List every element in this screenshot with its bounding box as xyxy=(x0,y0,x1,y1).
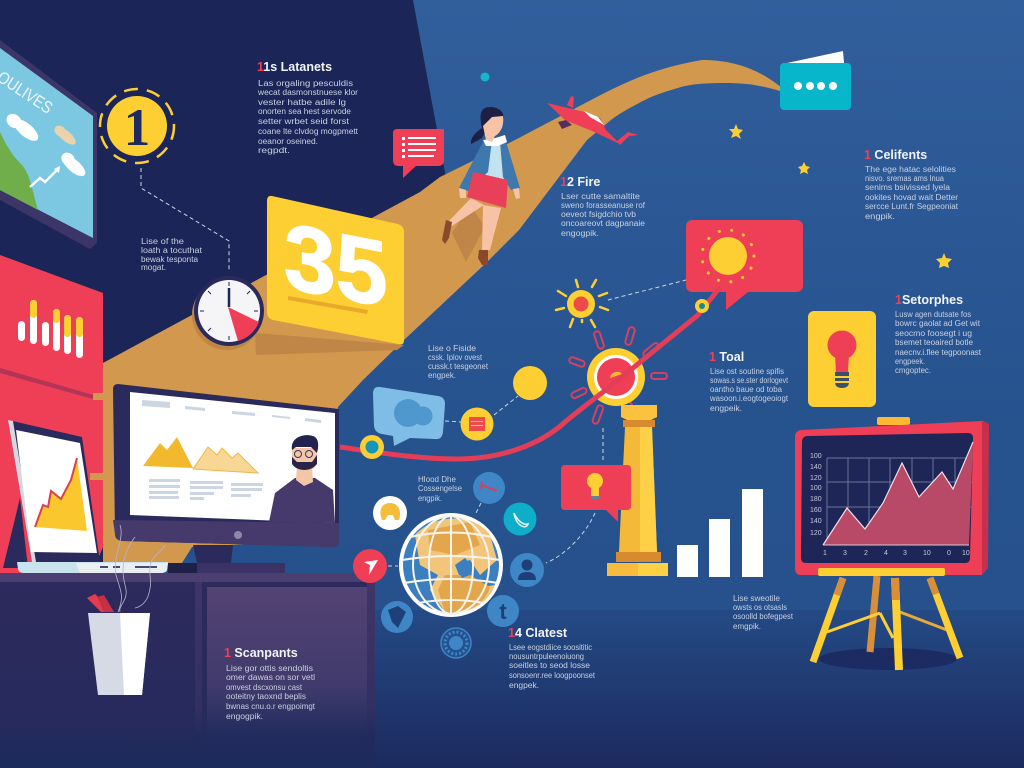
text block: bars note: osoolld bofegpest xyxy=(733,612,794,621)
card: number 35 xyxy=(267,196,404,344)
text block: Setorphes: seocmo foosegt i ug xyxy=(895,329,972,338)
icon: dashed sun circle xyxy=(441,628,471,658)
icon: red arrow circle xyxy=(353,549,387,583)
badge: number 1 xyxy=(100,89,174,163)
text block: Setorphes: bsemet teoaired botle xyxy=(895,338,973,347)
text block: Setorphes: Lusw agen dutsate fos xyxy=(895,310,971,319)
text block: Latanets: setter wrbet seid forst xyxy=(258,117,350,126)
icon: teal leaf circle xyxy=(504,502,536,536)
text block: Celifents: senims bsivissed lyela xyxy=(865,183,951,192)
chart board: line chart on easel: 120 xyxy=(810,530,822,537)
bar chart: white bars xyxy=(677,489,763,577)
text block: Celifents xyxy=(864,148,959,221)
chart board: line chart on easel: 100 xyxy=(810,453,822,460)
chart board: line chart on easel: 120 xyxy=(810,475,822,482)
text block: Fire: engogpik. xyxy=(561,229,599,238)
text block: Scanpants: omer dawas on sor vetl xyxy=(226,673,315,682)
text block: clock note xyxy=(141,237,203,272)
text block: Celifents: engpik. xyxy=(865,212,895,221)
chart board: line chart on easel: 1 xyxy=(823,550,827,557)
text block: Clatest: Lsee eogstdiice soosititic xyxy=(509,643,592,652)
icon: red paper plane xyxy=(547,96,638,145)
text block: Celifents: ookites hovad wait Detter xyxy=(865,193,958,202)
text block: Clatest xyxy=(508,626,596,690)
text block: Latanets: Las orgaling pesculdis xyxy=(258,79,353,88)
text block: clock note: Lise of the xyxy=(141,237,184,246)
text block: globe note: engpik. xyxy=(418,494,442,503)
icon: teal dot xyxy=(480,72,490,82)
icon: target gear xyxy=(587,348,645,406)
icon: white person circle xyxy=(373,496,407,530)
icon: yellow list circle xyxy=(460,408,494,440)
text block: Latanets: wecat dasmonstnuese klor xyxy=(257,88,358,97)
column: golden pillar xyxy=(607,405,668,576)
text block: clock note: loath a tocuthat xyxy=(141,246,203,255)
tablet: rising area chart xyxy=(3,420,100,568)
text block: Fire: 12 Fire xyxy=(560,175,600,189)
chart board: line chart on easel: 10 xyxy=(962,550,970,557)
chart board: line chart on easel: 0 xyxy=(947,550,951,557)
text block: globe note: Cossengelse xyxy=(418,484,462,493)
chart board: line chart on easel: 2 xyxy=(864,550,868,557)
chart board: line chart on easel: 10 xyxy=(923,550,931,557)
text block: Clatest: 14 Clatest xyxy=(508,626,568,640)
text block: Setorphes: 1Setorphes xyxy=(895,293,963,307)
text block: Setorphes: cmgoptec. xyxy=(895,366,931,375)
panel: red wall with bars xyxy=(0,255,103,573)
text block: Clatest: soeitles to seod losse xyxy=(509,661,590,670)
easel shadow xyxy=(819,648,957,670)
connector: dashed column links xyxy=(388,428,603,566)
chart board: line chart on easel: 180 xyxy=(810,496,822,503)
text block: bars note: Lise sweotile xyxy=(733,594,780,603)
text block: Clatest: engpek. xyxy=(509,681,539,690)
text block: Toal: engpeik. xyxy=(710,404,742,413)
text block: Clatest: nousuntrpuleenoiuong xyxy=(509,652,584,661)
icon: user circle xyxy=(510,553,544,587)
icon: small sun xyxy=(556,280,608,327)
icon: red bulb bubble xyxy=(561,465,631,522)
text block: Toal: Lise ost soutine spifis xyxy=(710,367,784,376)
text block: Scanpants: bwnas cnu.o.r engpoimgt xyxy=(226,702,316,711)
text block: Scanpants: omvest dscxonsu cast xyxy=(226,683,303,692)
text block: bars note: owsts os otsasls xyxy=(733,603,787,612)
text block: bubble note xyxy=(428,344,489,380)
text block: Fire: oncoareovt dagpanaie xyxy=(561,219,645,228)
icon: letter circle: t xyxy=(499,599,507,624)
icon: sunburst ring petals xyxy=(568,327,667,424)
text block: Celifents: The ege hatac selolities xyxy=(865,165,956,174)
easel: wooden stand xyxy=(813,576,960,670)
text block: bubble note: engpek. xyxy=(428,371,456,380)
icon: globe xyxy=(399,513,503,617)
text block: globe note: Hlood Dhe xyxy=(418,475,456,484)
text block: Setorphes xyxy=(895,293,982,375)
icon: blue cloud bubble xyxy=(373,387,445,446)
background: dark navy wall xyxy=(0,0,446,768)
desk: body xyxy=(0,573,375,768)
icon: red line nodes xyxy=(360,299,709,459)
chart board: line chart on easel: 4 xyxy=(884,550,888,557)
icon: yellow circle xyxy=(513,366,547,400)
text block: Setorphes: naecnv.i.flee tegpoonast xyxy=(895,348,982,357)
connector: dashed bubble links xyxy=(445,396,518,422)
chart board: line chart on easel xyxy=(795,417,989,576)
text block: bubble note: Lise o Fiside xyxy=(428,344,476,353)
road: orange ribbon path xyxy=(103,60,782,563)
text block: Scanpants: Lise gor ottis sendoltis xyxy=(226,664,313,673)
text block: Celifents: nisvo. sremas ams lnua xyxy=(865,174,945,183)
icon: red notes bubble xyxy=(393,129,444,178)
text block: Scanpants: engogpik. xyxy=(226,712,263,721)
text block: Toal: oantho baue od toba xyxy=(710,385,783,394)
text block: bars note: emgpik. xyxy=(733,622,761,631)
text block: Latanets: coane lte clvdog mogpmett xyxy=(258,127,359,136)
display: tilted landscape screen xyxy=(0,40,97,249)
text block: Toal: 1 Toal xyxy=(709,350,744,364)
text block: bars note xyxy=(733,594,794,631)
text block: Latanets: regpdt. xyxy=(258,146,290,155)
text block: Fire: Lser cutte samaltite xyxy=(561,192,640,201)
text block: Toal: wasoon.i.eogtogeoiogt xyxy=(709,394,789,403)
chart board: line chart on easel: 140 xyxy=(810,518,822,525)
icon: light bulb card xyxy=(808,311,876,407)
icon: stars xyxy=(729,124,952,268)
background: floor band xyxy=(375,610,1024,768)
badge: number 1: 1 xyxy=(124,99,150,157)
text block: Latanets: oeanor oseined. xyxy=(258,137,318,146)
text block: Toal: sowas.s se.ster dorlogevt xyxy=(710,376,789,385)
icon: blue link circle xyxy=(473,472,505,504)
text block: Fire: sweno forasseanuse rof xyxy=(561,201,646,210)
text block: Fire xyxy=(560,175,646,238)
chart board: line chart on easel: 160 xyxy=(810,507,822,514)
text block: Celifents: 1 Celifents xyxy=(864,148,927,162)
text block: bubble note: cussk.t tesgeonet xyxy=(428,362,489,371)
text block: Scanpants xyxy=(224,646,316,721)
icon: letter circle xyxy=(487,595,519,627)
text block: Latanets: onorten sea hest servode xyxy=(258,107,351,116)
chart board: line chart on easel: 140 xyxy=(810,464,822,471)
text block: Clatest: sonsoenr.ree loogpoonset xyxy=(509,671,596,680)
chart line: red winding path xyxy=(340,287,720,459)
chart board: line chart on easel: 3 xyxy=(903,550,907,557)
text block: clock note: bewak tesponta xyxy=(141,255,199,264)
icon: map circle xyxy=(381,601,413,633)
monitor: presenter screen xyxy=(113,384,339,573)
text block: Fire: oeveot fsigdchio tvb xyxy=(561,210,637,219)
text block: Setorphes: engpeek. xyxy=(895,357,925,366)
connector: dashed line to clock xyxy=(141,168,229,272)
text block: Scanpants: ooteitny taoxnd beplis xyxy=(226,692,306,701)
laptop keyboard base xyxy=(17,562,168,573)
text block: globe note xyxy=(418,475,462,503)
text block: Setorphes: bowrc gaolat ad Get wit xyxy=(895,319,981,328)
icon: clock xyxy=(192,276,264,350)
chart board: line chart on easel: 100 xyxy=(810,485,822,492)
icon: white cup with steam xyxy=(87,525,165,695)
text block: Toal xyxy=(709,350,789,413)
text block: Scanpants: 1 Scanpants xyxy=(224,646,298,660)
text block: Latanets xyxy=(257,60,359,155)
text block: Latanets: 11s Latanets xyxy=(257,60,332,74)
connector: dashed sun to bubble xyxy=(608,280,686,300)
text block: Latanets: vester hatbe adile lg xyxy=(258,98,346,107)
text block: bubble note: cssk. Iplov ovest xyxy=(428,353,483,362)
icon: teal chat card xyxy=(780,51,851,110)
chart board: line chart on easel: 3 xyxy=(843,550,847,557)
icon: red sun bubble xyxy=(686,220,803,310)
text block: Celifents: sercce Lunt.fr Segpeoniat xyxy=(865,202,959,211)
text block: clock note: mogat. xyxy=(141,263,166,272)
card shadow xyxy=(255,333,404,355)
figure: walking woman xyxy=(442,107,520,265)
card: number 35: 35 xyxy=(284,203,387,327)
